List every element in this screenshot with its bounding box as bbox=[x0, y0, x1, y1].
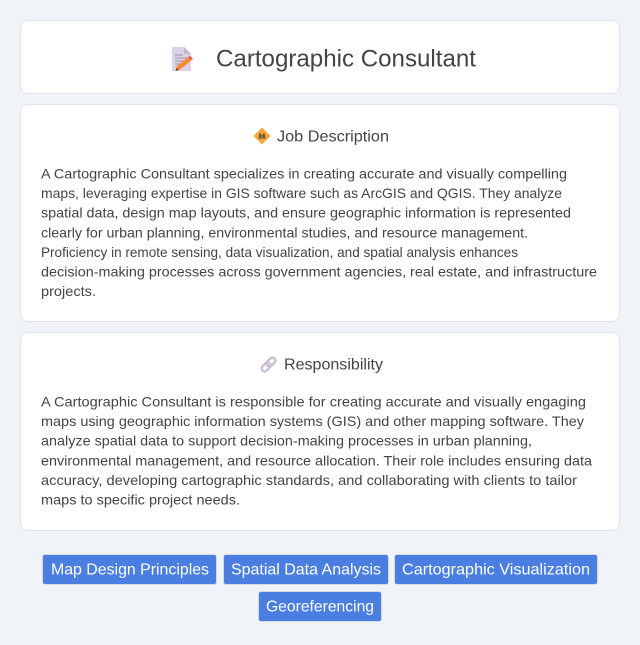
tag: georeferencing bbox=[258, 591, 382, 622]
text block: job description: Proficiency in remote sensing, data visualization, and spatial analysis enhances bbox=[41, 244, 518, 260]
text block: responsibility: analyze spatial data to support decision-making processes in urban planning, bbox=[41, 433, 532, 449]
text block: job description: spatial data, design map layouts, and ensure geographic information is represented bbox=[41, 205, 571, 221]
tag: georeferencing: Georeferencing bbox=[266, 598, 374, 616]
text block: responsibility bbox=[41, 394, 592, 508]
text block: responsibility: accuracy, developing cartographic standards, and collaborating with clients to tailor bbox=[41, 472, 577, 488]
text block: responsibility: maps using geographic information systems (GIS) and other mapping software. They bbox=[41, 413, 584, 429]
panel: job description bbox=[20, 104, 620, 322]
text block: job description: maps, leveraging expertise in GIS software such as ArcGIS and QGIS. They analyze bbox=[41, 185, 562, 201]
text block: job description bbox=[41, 166, 597, 299]
icon: road sign diamond bbox=[254, 128, 270, 144]
text block: responsibility: A Cartographic Consultant is responsible for creating accurate and visually engaging bbox=[41, 394, 586, 410]
title: Cartographic Consultant bbox=[216, 46, 476, 72]
icon: chain link bbox=[260, 356, 276, 373]
tag: cartographic visualization bbox=[394, 554, 598, 585]
tag: cartographic visualization: Cartographic Visualization bbox=[402, 562, 590, 578]
text block: job description: clearly for urban planning, environmental studies, and resource management. bbox=[41, 224, 528, 240]
panel: header bbox=[20, 20, 620, 94]
tag: spatial data analysis: Spatial Data Analysis bbox=[231, 562, 381, 578]
text block: job description: A Cartographic Consultant specializes in creating accurate and visually compelling bbox=[41, 166, 567, 182]
panel: responsibility bbox=[20, 332, 620, 531]
tag: spatial data analysis bbox=[223, 554, 389, 585]
heading: responsibility: Responsibility bbox=[284, 356, 383, 374]
tag: map design principles bbox=[42, 554, 217, 585]
heading: job description: Job Description bbox=[277, 128, 389, 146]
tag: map design principles: Map Design Principles bbox=[51, 562, 209, 578]
text block: job description: projects. bbox=[41, 283, 96, 299]
text block: responsibility: maps to specific project needs. bbox=[41, 492, 240, 508]
icon: document with pencil bbox=[172, 47, 193, 71]
text block: job description: decision-making processes across government agencies, real estate, and infrastructure bbox=[41, 264, 597, 280]
text block: responsibility: environmental management, and resource allocation. Their role includes ensuring data bbox=[41, 452, 592, 468]
